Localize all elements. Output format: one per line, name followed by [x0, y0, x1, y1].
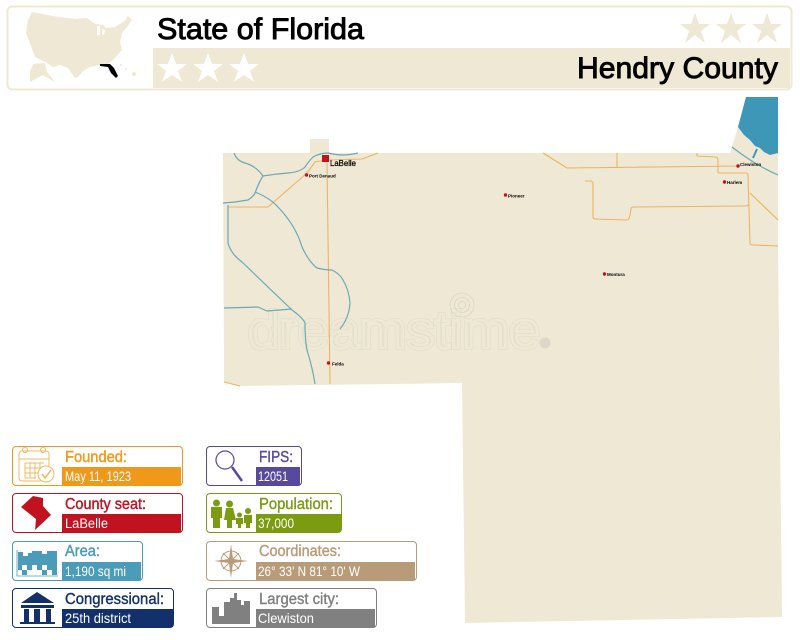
town: Felda: [327, 361, 344, 366]
panel: congressional: [12, 588, 174, 628]
lake okeechobee: [738, 97, 778, 155]
panel: largest city: [206, 588, 376, 628]
icon: magnifying glass: [216, 451, 242, 481]
panel: coordinates: [206, 542, 416, 580]
roads: [224, 153, 778, 386]
town: Montura: Montura: [607, 272, 625, 277]
icon: government building: [20, 592, 55, 624]
panel: founded: [12, 446, 182, 486]
icon: compass rose: [214, 544, 248, 578]
icon: white stars: [157, 53, 259, 82]
town: Clewiston: Clewiston: [740, 162, 762, 167]
panel: largest city: Clewiston: [258, 610, 314, 626]
title: state: State of Florida: [157, 13, 364, 46]
panel: population: [206, 494, 342, 532]
panel: congressional: Congressional:: [65, 591, 164, 608]
subtitle: county: Hendry County: [577, 52, 778, 85]
panel: area: Area:: [65, 543, 100, 560]
town: Harlem: Harlem: [727, 180, 742, 185]
icon: USA locator map with Florida highlighted: [26, 12, 136, 82]
county land: [223, 97, 782, 623]
panel: coordinates: 26° 33' N 81° 10' W: [258, 563, 361, 579]
header banner: [8, 6, 792, 90]
rivers: [223, 147, 778, 384]
icon: family: [211, 500, 252, 528]
panel: founded: May 11, 1923: [65, 468, 131, 484]
panel: founded: Founded:: [65, 449, 127, 466]
town: Port Denaud: Port Denaud: [309, 174, 336, 178]
panel: FIPS: 12051: [258, 468, 288, 484]
panel: largest city: Largest city:: [259, 591, 339, 608]
panel: area: 1,190 sq mi: [65, 563, 126, 579]
panel: population: 37,000: [258, 515, 294, 531]
town: LaBelle (county seat): LaBelle: [330, 158, 356, 168]
town: Felda: Felda: [332, 362, 344, 366]
town: Pioneer: Pioneer: [508, 194, 525, 198]
icon: county shape: [21, 496, 51, 530]
icon: cream stars: [680, 13, 782, 43]
panel: population: Population:: [259, 496, 333, 513]
panel: county seat: LaBelle: [65, 515, 108, 531]
watermark: dreamstime: [248, 302, 540, 360]
panel: FIPS: [206, 446, 302, 486]
panel: coordinates: Coordinates:: [259, 543, 341, 560]
icon: skyline: [212, 593, 250, 624]
panel: county seat: County seat:: [65, 496, 146, 513]
panel: congressional: 25th district: [65, 610, 131, 626]
watermark: dreamstime: [248, 302, 540, 360]
county map: [223, 97, 782, 623]
panel: county seat: [12, 494, 182, 532]
town: LaBelle (county seat): [322, 155, 356, 168]
icon: area grid: [17, 550, 58, 576]
panel: area: [12, 542, 142, 580]
icon: calendar: [19, 448, 54, 482]
panel: FIPS: FIPS:: [259, 449, 293, 466]
